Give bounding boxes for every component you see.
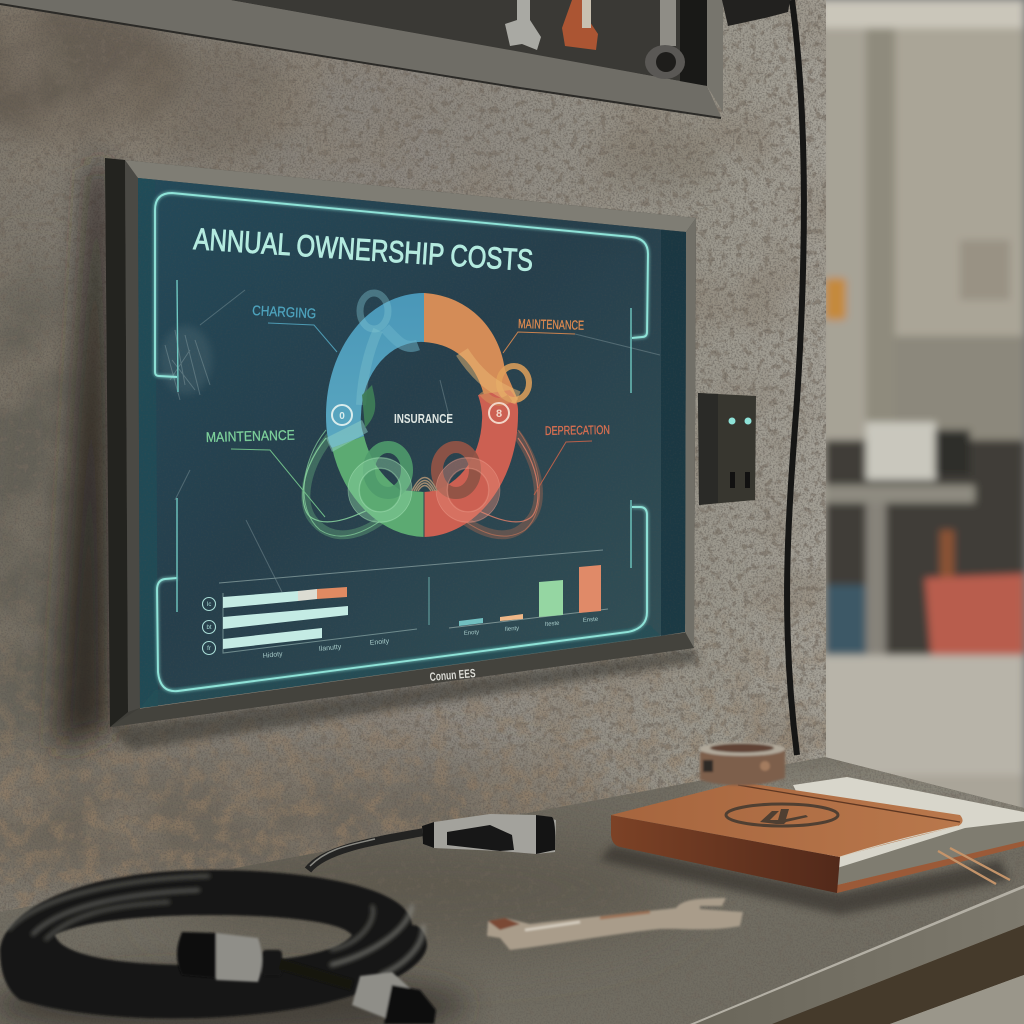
table xyxy=(0,750,1024,1024)
monitor xyxy=(105,158,696,727)
background: blurred workshop xyxy=(820,0,1024,1024)
bar 2 xyxy=(223,606,348,629)
bar: green xyxy=(539,580,563,617)
callout: charging xyxy=(252,302,337,352)
chart divider xyxy=(428,577,430,625)
callout: maintenance green xyxy=(206,427,325,517)
metal ring xyxy=(699,742,785,786)
ribbon: green swirls xyxy=(348,447,412,522)
ribbon: outer red xyxy=(445,430,539,536)
callout: charging: CHARGING xyxy=(252,302,317,321)
donut chart xyxy=(303,293,539,537)
center mound xyxy=(412,478,437,491)
icon: hanging spanner xyxy=(645,0,685,79)
hanging black cable xyxy=(787,0,804,755)
table front face xyxy=(690,885,1024,1024)
bar labels: Ilenty xyxy=(505,626,519,633)
axis labels xyxy=(262,638,390,660)
bar 3 xyxy=(223,628,322,649)
charging connector xyxy=(308,814,556,870)
ribbon: green wedge xyxy=(362,385,375,428)
book back cover edge xyxy=(837,841,1024,893)
bar: orange xyxy=(500,614,523,621)
bar icon labels xyxy=(206,602,212,652)
ribbon: orange loop xyxy=(462,352,529,402)
bar labels: Iteste xyxy=(545,621,560,628)
tool shelf xyxy=(0,0,790,118)
ribbon: outer green xyxy=(303,430,400,536)
segment: depreciation xyxy=(424,390,518,537)
callout: maintenance green: MAINTENANCE xyxy=(206,427,295,445)
book cover xyxy=(611,782,963,857)
monitor frame xyxy=(105,158,696,727)
cable plugs xyxy=(177,932,436,1024)
callout: depreciation xyxy=(534,423,610,495)
bar icon labels: fr xyxy=(207,646,211,652)
connector grip xyxy=(447,825,514,851)
concrete wall xyxy=(0,0,826,930)
bar icons xyxy=(202,598,216,654)
scratches on screen xyxy=(165,290,660,592)
bar 1 xyxy=(223,587,347,608)
center label: insurance: INSURANCE xyxy=(394,412,453,426)
screen xyxy=(138,178,686,708)
horizontal bar chart xyxy=(202,550,603,660)
book emblem xyxy=(726,804,838,826)
table top xyxy=(0,757,1024,1024)
bar icon labels: bt xyxy=(206,625,212,631)
bar labels xyxy=(464,617,599,637)
wall outlet xyxy=(698,393,756,505)
title: ANNUAL OWNERSHIP COSTS xyxy=(193,222,534,278)
overlap highlight xyxy=(326,420,368,452)
bezel logo: Conun EES xyxy=(429,666,476,684)
badge left: 0 xyxy=(339,411,345,422)
bar labels: Enoty xyxy=(464,630,479,637)
segment divider xyxy=(423,491,425,537)
wrench on table xyxy=(487,898,743,950)
icon: hanging wrench xyxy=(505,0,541,50)
badge right: 8 xyxy=(496,408,502,420)
callout: maintenance orange: MAINTENANCE xyxy=(518,316,585,333)
icon: wall box xyxy=(722,0,790,26)
plug 1 xyxy=(177,932,216,978)
bar: red xyxy=(579,565,601,613)
segment: maintenance green xyxy=(332,436,424,537)
neon frame xyxy=(155,193,648,691)
book spine xyxy=(611,815,840,893)
callout: depreciation: DEPRECATION xyxy=(545,423,610,438)
ribbon: red swirls xyxy=(436,447,500,522)
badge right xyxy=(489,403,509,423)
axis labels: Ilanutty xyxy=(318,644,342,653)
connector handle xyxy=(422,814,556,854)
bar icon labels: Ic xyxy=(207,602,211,608)
badge left xyxy=(332,405,352,425)
axis labels: Enoity xyxy=(369,638,390,647)
ribbon: blue loop xyxy=(360,293,418,405)
connector cable xyxy=(308,832,424,870)
icon: orange tool xyxy=(562,0,598,50)
book pages xyxy=(793,777,1024,885)
callout: maintenance orange xyxy=(503,316,585,353)
plug 2 xyxy=(352,972,412,1020)
segment: maintenance orange xyxy=(424,293,518,400)
segment: charging xyxy=(326,293,424,448)
bar: teal xyxy=(459,618,483,626)
coiled cable xyxy=(0,870,427,1018)
vertical bar chart xyxy=(449,565,608,637)
bar labels: Enste xyxy=(583,617,599,624)
bookmark ribbons xyxy=(938,848,1010,884)
book xyxy=(611,777,1024,893)
axis labels: Hidoty xyxy=(262,651,283,660)
